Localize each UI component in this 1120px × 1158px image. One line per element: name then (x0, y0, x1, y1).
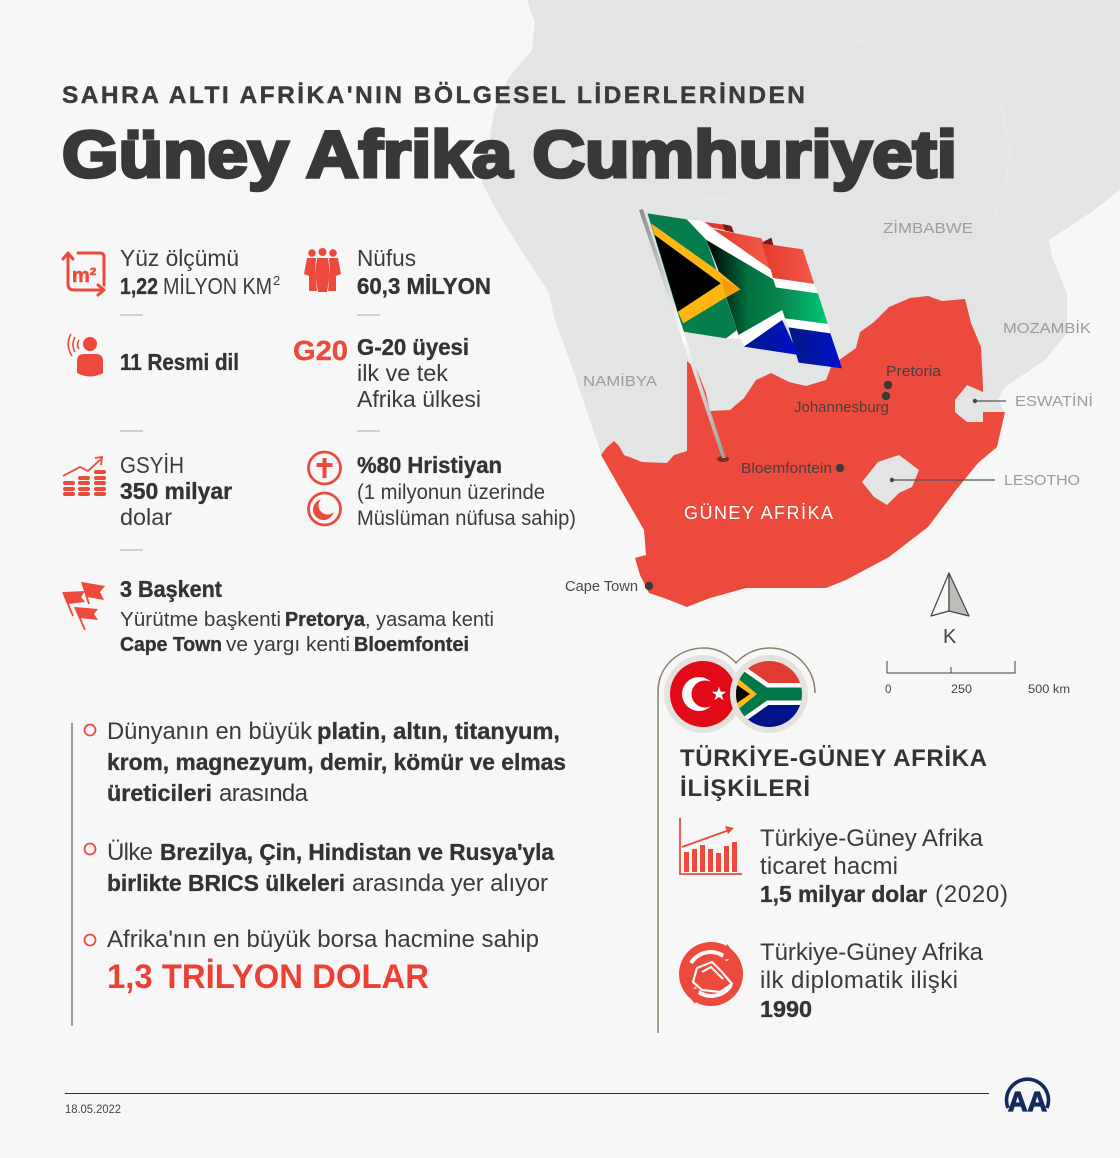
fact: mining: arasında (219, 780, 309, 807)
fact: stock exchange: Afrika'nın en büyük borsa hacmine sahip (107, 926, 539, 953)
stat: GDP: 350 milyar (120, 478, 232, 504)
fact: trade volume: Türkiye-Güney Afrika (760, 825, 984, 852)
icon: three flags (63, 582, 105, 630)
stat: population: Nüfus (357, 245, 416, 271)
icon: crescent (308, 493, 340, 525)
icon: South African flag (725, 655, 810, 734)
stat: surface area: 1,22 (120, 273, 158, 299)
fact: diplomatic relations (679, 939, 984, 1022)
icon: handshake with circular arrows (679, 942, 743, 1006)
fact: stock exchange: 1,3 TRİLYON DOLAR (107, 958, 429, 996)
stat: religion: (1 milyonun üzerinde (357, 481, 545, 504)
fact: trade volume: (2020) (935, 881, 1008, 908)
fact: diplomatic relations: ilk diplomatik ilişki (760, 967, 958, 994)
fact: stock exchange (84, 926, 539, 996)
fact: BRICS: arasında yer alıyor (352, 870, 548, 897)
panel: key facts (72, 718, 566, 1026)
fact: BRICS (84, 839, 555, 897)
fact: BRICS: Ülke (107, 839, 153, 866)
stat: G-20: Afrika ülkesi (357, 386, 481, 412)
fact: mining: üreticileri (107, 780, 212, 806)
map labels: cities: Pretoria (886, 364, 942, 380)
icon: cross (308, 452, 340, 484)
map labels: neighbouring countries: ESWATİNİ (1015, 392, 1093, 410)
stat: G-20: ilk ve tek (357, 360, 448, 386)
stat: surface area (63, 245, 280, 299)
stat: capitals: , yasama kenti (365, 609, 494, 631)
stat: official languages: 11 Resmi dil (120, 349, 239, 375)
stat: capitals: Bloemfontei (354, 634, 469, 656)
map labels: neighbouring countries: MOZAMBİK (1003, 319, 1091, 337)
scale bar: 500 km (1028, 684, 1070, 696)
stat: capitals: Pretorya (285, 609, 366, 631)
map labels: neighbouring countries (583, 219, 1093, 489)
stat: surface area: Yüz ölçümü (120, 245, 239, 271)
icon: m2 area: m² (72, 265, 97, 287)
fact: trade volume: ticaret hacmi (760, 853, 898, 880)
fact: diplomatic relations: 1990 (760, 996, 812, 1022)
scale bar: 250 (951, 684, 972, 696)
map labels: cities: Bloemfontein (741, 461, 832, 477)
map labels: cities: Cape Town (565, 579, 638, 595)
icon: people (304, 248, 341, 292)
stat: surface area: 2 (273, 273, 280, 288)
map labels: neighbouring countries: LESOTHO (1004, 472, 1080, 489)
icon: speaking person (68, 334, 103, 376)
stat: religion: %80 Hristiyan (357, 452, 502, 478)
map: southern Africa land mass (482, 0, 1120, 480)
stat: G-20 (293, 334, 481, 412)
icon: m2 area (63, 253, 104, 295)
stat: capitals: Cape Town (120, 634, 222, 656)
map: South Africa (601, 296, 1005, 607)
fact: BRICS: Brezilya, Çin, Hindistan ve Rusya'yla (160, 839, 555, 865)
stat: capitals: 3 Başkent (120, 576, 222, 602)
stat: capitals: ve yargı kenti (226, 634, 350, 656)
stat: population (304, 245, 491, 299)
scale bar (885, 661, 1070, 696)
heading: title: Güney Afrika Cumhuriyeti (62, 117, 957, 191)
stat: surface area: MİLYON KM (163, 273, 272, 299)
heading: relations (680, 745, 987, 802)
fact: trade volume: 1,5 milyar dolar (760, 881, 927, 907)
icon: Turkish flag (664, 655, 742, 733)
map: Eswatini (955, 385, 990, 422)
stat: official languages (68, 334, 239, 376)
map labels: neighbouring countries: ZİMBABWE (883, 219, 973, 237)
map: Lesotho (862, 455, 919, 505)
stat: population: 60,3 MİLYON (357, 273, 491, 299)
icon: compass (931, 573, 969, 648)
heading: relations: İLİŞKİLERİ (680, 775, 810, 802)
map labels: neighbouring countries: NAMİBYA (583, 372, 657, 390)
fact: mining: krom, magnezyum, demir, kömür ve elmas (107, 749, 566, 775)
stat: G-20: G-20 üyesi (357, 334, 469, 360)
scale bar: 0 (885, 684, 891, 696)
stat: capitals (63, 576, 494, 656)
stat: GDP: dolar (120, 504, 172, 530)
map labels: cities: Johannesburg (794, 400, 889, 416)
stat: GDP (63, 452, 232, 530)
icon: waving South African flag (639, 209, 842, 462)
fact: diplomatic relations: Türkiye-Güney Afrika (760, 939, 984, 966)
panel: Turkey-South Africa relations (658, 648, 1008, 1033)
heading: relations: TÜRKİYE-GÜNEY AFRİKA (680, 745, 987, 772)
icon: coins and rising chart (63, 457, 106, 496)
date: 18.05.2022 (65, 1104, 121, 1116)
map label: South Africa: GÜNEY AFRİKA (684, 503, 833, 523)
map labels: cities (565, 364, 942, 595)
heading: subtitle: SAHRA ALTI AFRİKA'NIN BÖLGESEL LİDERLERİNDEN (62, 82, 805, 109)
fact: mining: Dünyanın en büyük (107, 718, 313, 745)
stat: capitals: Yürütme başkenti (120, 609, 281, 631)
fact: mining (84, 718, 566, 807)
icon: compass: K (943, 626, 957, 648)
stat: religion (308, 452, 576, 530)
fact: mining: platin, altın, titanyum, (317, 718, 560, 744)
stat: religion: Müslüman nüfusa sahip) (357, 507, 576, 530)
fact: trade volume (680, 818, 1008, 908)
logo: Anadolu Agency: AA (1008, 1086, 1047, 1117)
fact: BRICS: birlikte BRICS ülkeleri (107, 870, 345, 896)
icon: G20: G20 (293, 335, 348, 366)
stat: GDP: GSYİH (120, 452, 184, 478)
icon: trade chart (680, 818, 742, 874)
